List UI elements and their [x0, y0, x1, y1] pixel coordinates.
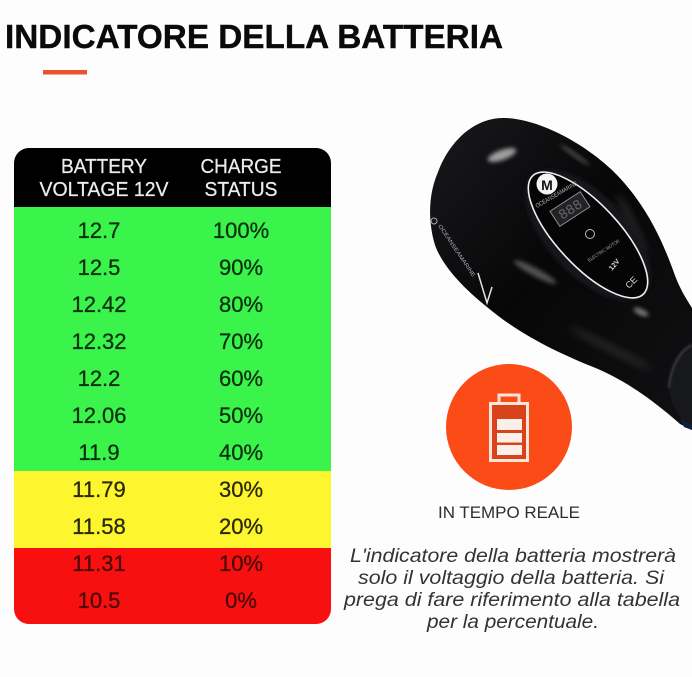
power button: [586, 230, 594, 238]
table rows: 10.5: [78, 588, 120, 613]
table header: CHARGE: [200, 156, 282, 178]
description text: per la percentuale.: [426, 612, 599, 633]
table rows: 50%: [219, 403, 263, 428]
title accent bar: [43, 70, 87, 74]
control panel oval: M: [541, 177, 553, 193]
handle neck: [669, 345, 692, 426]
description text: solo il voltaggio della batteria. Si: [358, 568, 665, 589]
battery levels: [497, 419, 522, 455]
table rows: 11.9: [78, 440, 120, 465]
table rows: 0%: [225, 588, 257, 613]
motor label: ELECTRIC MOTOR: [587, 238, 622, 264]
table rows: 80%: [219, 292, 263, 317]
product photo: motor handle: [430, 118, 692, 430]
panel: voltage table: [14, 148, 331, 624]
table rows: 12.06: [71, 403, 127, 428]
table rows: 90%: [219, 255, 263, 280]
voltage label: 12V: [608, 258, 622, 272]
LED display: 888: [556, 197, 586, 224]
CE mark: CE: [623, 274, 639, 290]
side logo strip: OCEANSEAMARINE: [436, 224, 476, 279]
table rows: 10%: [219, 551, 263, 576]
table rows: 12.2: [78, 366, 120, 391]
logo badge: [536, 174, 558, 194]
caption: real time: IN TEMPO REALE: [438, 503, 580, 522]
table rows: 12.5: [78, 255, 120, 280]
title: INDICATORE DELLA BATTERIA: [5, 18, 503, 55]
table rows: 70%: [219, 329, 263, 354]
table header: BATTERY: [61, 156, 147, 178]
table header: [39, 158, 281, 196]
table rows: [71, 218, 269, 613]
description text: L'indicatore della batteria mostrerà: [350, 546, 676, 567]
icon: battery in orange circle: [446, 364, 572, 490]
description text: [343, 546, 680, 633]
brand text: OCEANSEAMARINE: [535, 181, 579, 210]
table rows: 11.79: [72, 477, 126, 502]
table header: STATUS: [204, 179, 278, 201]
table rows: 20%: [219, 514, 263, 539]
description text: prega di fare riferimento alla tabella: [343, 590, 680, 611]
table rows: 12.7: [78, 218, 120, 243]
control panel oval: [503, 148, 673, 322]
table header: VOLTAGE 12V: [40, 179, 169, 201]
battery outline: [490, 395, 528, 460]
highlights: [486, 143, 653, 372]
table rows: 11.31: [72, 551, 126, 576]
table rows: 12.42: [71, 292, 127, 317]
table rows: 30%: [219, 477, 263, 502]
side logo strip: [431, 218, 492, 303]
table rows: 100%: [213, 218, 269, 243]
table rows: 11.58: [72, 514, 126, 539]
table rows: 12.32: [71, 329, 127, 354]
LED display: [550, 192, 591, 227]
table rows: 40%: [219, 440, 263, 465]
table rows: 60%: [219, 366, 263, 391]
